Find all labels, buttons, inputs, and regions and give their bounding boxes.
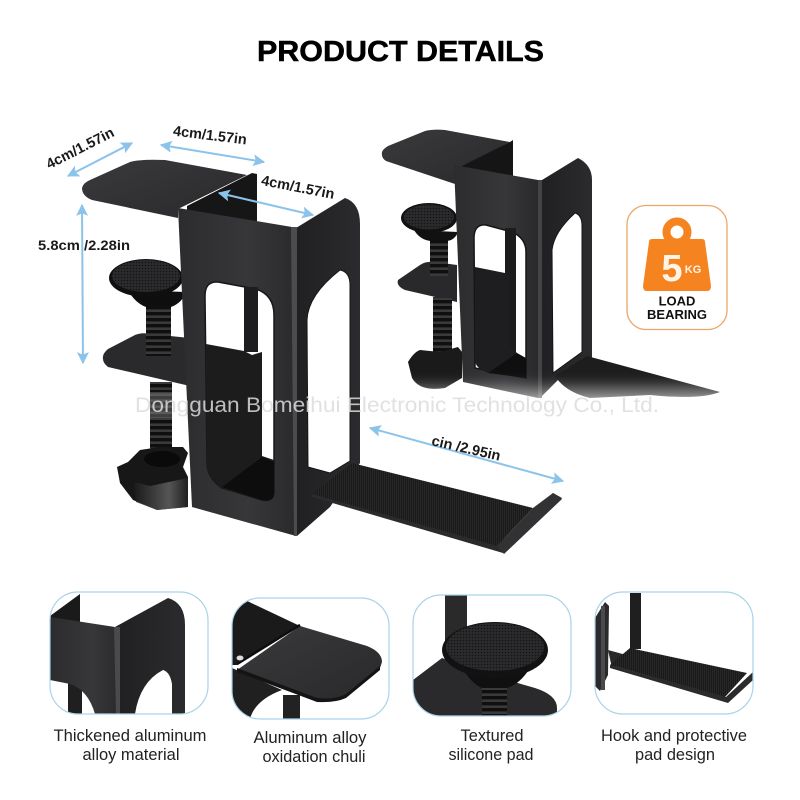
front panel opening — [205, 282, 274, 500]
secondary clamp product view — [382, 130, 720, 398]
textured disk — [109, 259, 186, 307]
caption: Aluminum alloy — [254, 728, 367, 747]
title: PRODUCT DETAILS — [257, 36, 544, 68]
mid shelf — [103, 333, 190, 386]
panel: thickened aluminum — [50, 592, 208, 764]
thumbnail: hook pad detail — [595, 593, 753, 703]
label: height: 5.8cm /2.28in — [38, 237, 130, 253]
caption: Textured — [460, 726, 524, 745]
load bearing badge: BEARING — [647, 307, 707, 322]
lower screw — [150, 382, 172, 457]
label: hook length: cin /2.95in — [430, 433, 502, 465]
haze over lower screw — [150, 392, 172, 418]
dimension arrow: opening — [219, 193, 313, 215]
panel: oxidation plate: oxidation chuli — [262, 747, 366, 766]
label: depth: 4cm/1.57in — [44, 125, 117, 173]
caption: Thickened aluminum — [54, 726, 206, 745]
label: width: 4cm/1.57in — [172, 124, 248, 148]
panel: hook pad — [595, 592, 753, 764]
label: opening: 4cm/1.57in — [260, 173, 336, 203]
panel: thickened aluminum: alloy material — [82, 745, 180, 764]
main clamp product view — [82, 160, 562, 554]
panel: silicone pad: silicone pad — [448, 745, 534, 764]
hook pad — [312, 463, 562, 554]
thumbnail: plate detail — [232, 600, 382, 719]
side panel opening — [307, 270, 350, 473]
watermark: Dongguan Bomeihui Electronic Technology Co., Ltd. — [135, 394, 659, 417]
thumbnail: corner detail — [50, 594, 185, 714]
rear wall — [187, 173, 257, 232]
load bearing badge — [627, 206, 727, 330]
dimension arrow: depth — [68, 143, 132, 176]
white fade under secondary clamp — [376, 379, 745, 430]
badge caption: LOAD — [659, 294, 695, 308]
view through opening — [244, 287, 258, 352]
panel: hook pad: pad design — [635, 745, 715, 764]
icon: 5kg weight: 5 — [661, 248, 683, 290]
dimension arrow: height — [82, 205, 83, 363]
caption: Hook and protective — [601, 726, 747, 745]
thumbnail: textured disk — [413, 595, 557, 716]
icon: 5kg weight — [643, 222, 711, 291]
dimension arrow: width — [161, 145, 264, 162]
front panel — [178, 208, 296, 536]
panel: oxidation plate — [232, 598, 389, 766]
panel: silicone pad — [413, 595, 571, 764]
wing knob — [117, 447, 188, 510]
icon: 5kg weight: KG — [685, 264, 701, 276]
side panel — [296, 198, 360, 536]
top plate — [82, 160, 247, 218]
dimension arrow: hook length — [370, 428, 563, 481]
upper screw — [146, 306, 171, 356]
